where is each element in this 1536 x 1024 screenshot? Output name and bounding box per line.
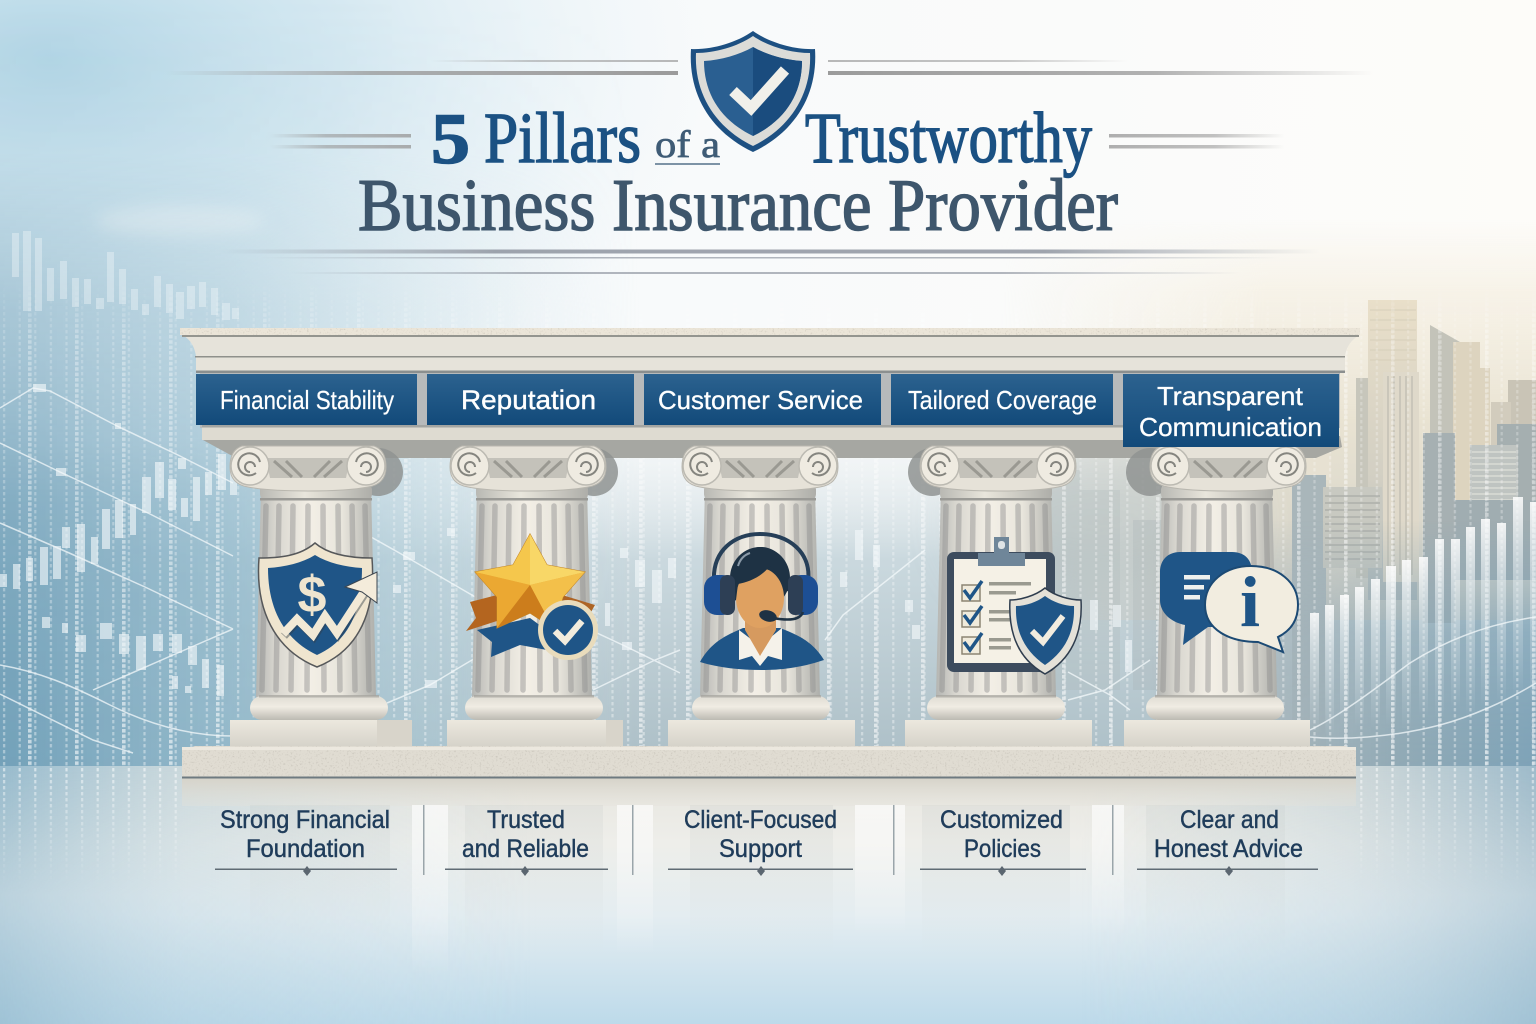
background: city skyline <box>1030 300 1536 770</box>
caption: Customized Policies: Customized <box>940 806 1063 834</box>
temple base platform <box>182 746 1356 778</box>
caption: Customized Policies: Policies <box>964 835 1041 863</box>
title: Trustworthy <box>805 98 1092 178</box>
header band: Financial Stability <box>196 374 417 425</box>
header band: Tailored Coverage: Tailored Coverage <box>908 385 1097 415</box>
pillar 5 <box>1124 446 1310 746</box>
caption: Client-Focused Support: Client-Focused <box>684 806 837 834</box>
divider <box>423 805 424 875</box>
header band: Transparent Communication: Communication <box>1139 412 1322 442</box>
header band: Financial Stability: Financial Stability <box>220 385 394 415</box>
header band: Reputation <box>427 374 634 425</box>
icon: title shield with check <box>691 31 815 152</box>
caption: Strong Financial Foundation: Foundation <box>246 835 365 863</box>
caption: Trusted and Reliable <box>445 806 608 876</box>
background: dotted data columns <box>0 280 1536 770</box>
pillar 4 <box>905 446 1092 746</box>
caption: Client-Focused Support: Support <box>719 835 802 863</box>
floor reflection <box>0 766 1536 1024</box>
title rules <box>165 60 1373 274</box>
caption: Clear and Honest Advice <box>1137 806 1318 876</box>
background: trend lines <box>0 388 1536 753</box>
title: of a <box>655 124 720 166</box>
icon: clipboard with checklist and shield <box>947 537 1081 674</box>
temple entablature <box>180 328 1360 440</box>
caption: Customized Policies <box>920 806 1086 876</box>
pillar 1 <box>230 446 412 746</box>
title <box>358 98 1118 247</box>
title: Pillars <box>484 98 641 178</box>
background sky and gradient <box>0 0 1536 766</box>
header band: Customer Service <box>644 374 881 425</box>
icon: customer service agent with headset <box>700 534 824 670</box>
caption: Clear and Honest Advice: Honest Advice <box>1154 835 1303 863</box>
icon: speech bubbles with information symbol <box>1160 552 1298 652</box>
caption: Clear and Honest Advice: Clear and <box>1180 806 1279 834</box>
icon: shield with dollar and rising arrow: $ <box>298 566 327 624</box>
divider <box>893 805 894 875</box>
icon: gold star with ribbon and check badge <box>466 534 598 660</box>
divider <box>1112 805 1114 875</box>
header band: Transparent Communication: Transparent <box>1157 381 1304 411</box>
title: Business Insurance Provider <box>358 165 1118 247</box>
pillar 3 <box>668 446 855 746</box>
caption: Client-Focused Support <box>668 806 853 876</box>
icon: shield with dollar and rising arrow <box>258 543 377 667</box>
header band: Reputation: Reputation <box>461 385 596 415</box>
background: candlestick chart left <box>0 231 1132 696</box>
header band: Tailored Coverage <box>891 374 1113 425</box>
temple underside shadow <box>203 436 1342 458</box>
icon: speech bubbles with information symbol: i <box>1240 562 1260 642</box>
background: bar chart right <box>1310 497 1536 735</box>
header band: Customer Service: Customer Service <box>658 385 863 415</box>
title: 5 <box>431 99 470 179</box>
divider <box>632 805 634 875</box>
caption: Strong Financial Foundation: Strong Financial <box>220 806 390 834</box>
header band: Transparent Communication <box>1123 374 1339 447</box>
caption: Trusted and Reliable: and Reliable <box>462 835 589 863</box>
pillar 2 <box>447 446 623 746</box>
caption: Trusted and Reliable: Trusted <box>487 806 565 834</box>
caption: Strong Financial Foundation <box>215 806 397 876</box>
